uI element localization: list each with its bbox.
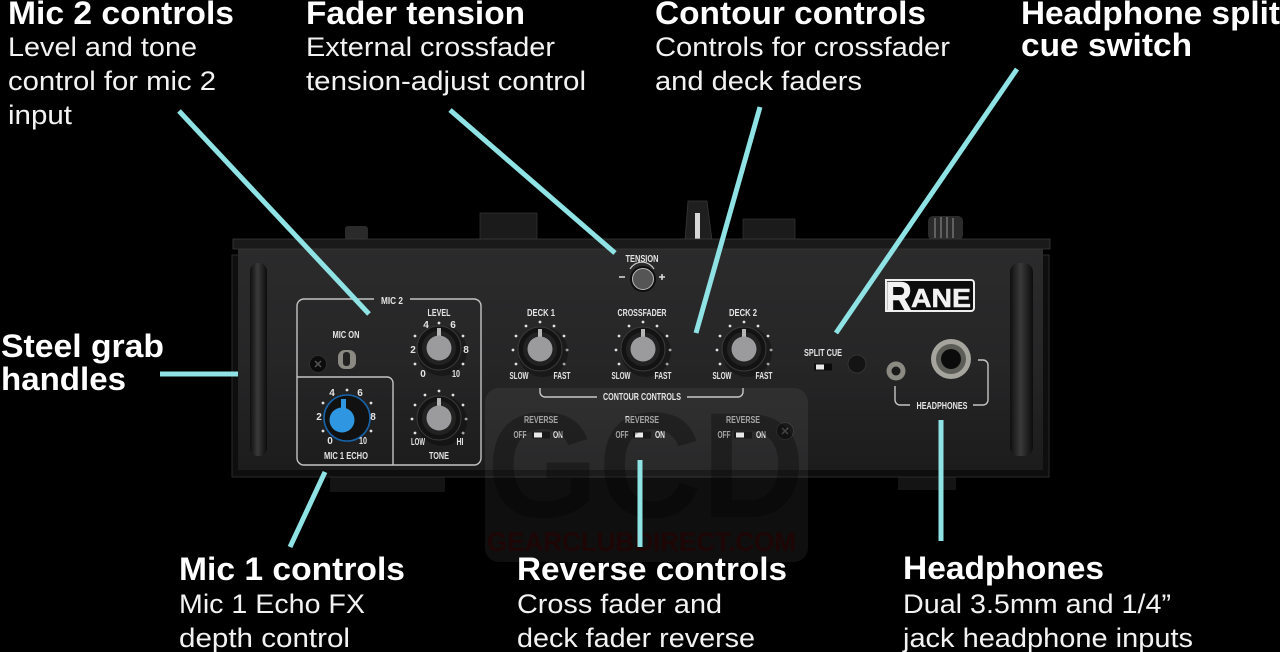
reverse controls: ON — [756, 430, 766, 441]
mic 2 section: 6 — [450, 320, 456, 331]
callout: contour controls: Controls for crossfader — [655, 32, 950, 62]
contour controls: SLOW — [612, 371, 631, 382]
steel grab handle left — [250, 263, 267, 456]
contour controls: FAST — [554, 371, 570, 382]
contour controls: CONTOUR CONTROLS — [603, 392, 681, 403]
callout: fader tension: External crossfader — [306, 32, 555, 62]
mic 1 echo section: 4 — [329, 388, 335, 399]
mic 2 section: LOW — [411, 437, 425, 448]
reverse controls: OFF — [514, 430, 526, 441]
callout: headphones: Dual 3.5mm and 1/4” — [903, 589, 1171, 619]
mic 1 echo section: MIC 1 ECHO — [324, 451, 368, 462]
contour controls: SLOW — [712, 371, 732, 382]
watermark: GEARCLUBDIRECT.COM — [487, 527, 796, 557]
reverse controls: OFF — [616, 430, 628, 441]
callout: mic 2 controls — [8, 0, 369, 314]
callout: headphones — [902, 420, 1193, 652]
reverse controls — [514, 415, 794, 441]
mic 1 echo section: 8 — [370, 412, 376, 423]
callout: contour controls — [655, 0, 950, 333]
callout: reverse controls — [517, 460, 787, 652]
callout: fader tension — [306, 0, 615, 253]
callout: steel grab handles: handles — [1, 361, 126, 397]
steel grab handle right — [1010, 263, 1033, 456]
reverse controls: REVERSE — [524, 415, 558, 426]
callout: mic 1 controls: Mic 1 controls — [179, 551, 405, 587]
reverse controls: OFF — [718, 430, 730, 441]
reverse controls: ON — [553, 430, 563, 441]
contour controls: DECK 1 — [527, 308, 555, 319]
callout: steel grab handles: Steel grab — [1, 328, 164, 364]
callout: mic 2 controls: Level and tone — [8, 32, 197, 62]
contour controls: CROSSFADER — [618, 308, 667, 319]
mic 2 section: HI — [456, 437, 464, 448]
callout: fader tension: tension-adjust control — [306, 66, 586, 96]
headphone jacks: HEADPHONES — [916, 401, 968, 412]
top controls behind panel — [345, 201, 963, 240]
tension control: TENSION — [626, 254, 658, 265]
split cue switch: SPLIT CUE — [804, 348, 842, 359]
mic 2 section: MIC 2 — [381, 296, 403, 307]
split cue switch — [804, 348, 866, 373]
callout: mic 2 controls: control for mic 2 — [8, 66, 216, 96]
reverse controls: REVERSE — [625, 415, 659, 426]
callout: reverse controls: Reverse controls — [517, 551, 787, 587]
mic 2 section: 2 — [410, 345, 416, 356]
chassis — [232, 239, 1050, 492]
mic 2 section — [297, 296, 481, 465]
mic 2 section: 4 — [423, 320, 429, 331]
contour controls: FAST — [756, 371, 772, 382]
callout: mic 1 controls: Mic 1 Echo FX — [179, 589, 365, 619]
mic 1 echo section — [316, 388, 376, 462]
headphone jacks — [886, 339, 988, 412]
mic 1 echo section: 6 — [357, 388, 363, 399]
rane logo: R — [885, 273, 912, 320]
callout: headphone split cue switch: cue switch — [1021, 27, 1192, 63]
callout: steel grab handles — [1, 328, 238, 397]
mic 2 section: LEVEL — [428, 308, 450, 319]
callout: headphones: Headphones — [903, 550, 1104, 586]
mixer front panel — [232, 201, 1050, 492]
tension control — [619, 254, 665, 292]
callout: headphone split cue switch — [836, 0, 1280, 333]
reverse controls: ON — [655, 430, 665, 441]
watermark: GCD — [487, 381, 805, 549]
reverse controls: REVERSE — [726, 415, 760, 426]
contour controls: DECK 2 — [729, 308, 757, 319]
mic 1 echo section: 0 — [327, 436, 333, 447]
mic 1 echo section: 10 — [359, 436, 367, 447]
rane logo: ANE — [911, 283, 971, 313]
callout: reverse controls: Cross fader and — [517, 589, 722, 619]
mic 2 section: 0 — [420, 369, 426, 380]
mic 2 section: TONE — [429, 451, 449, 462]
callout: mic 1 controls — [179, 472, 405, 652]
contour controls — [510, 308, 772, 403]
callout: contour controls: and deck faders — [655, 66, 862, 96]
callout: mic 2 controls: input — [8, 100, 73, 130]
mic 1 echo section: 2 — [316, 412, 322, 423]
mic 2 section: 8 — [463, 345, 469, 356]
mic 2 section: MIC ON — [332, 330, 360, 341]
rane logo — [885, 273, 974, 320]
contour controls: SLOW — [510, 371, 529, 382]
mic 2 section: 10 — [452, 369, 460, 380]
contour controls: FAST — [654, 371, 672, 382]
